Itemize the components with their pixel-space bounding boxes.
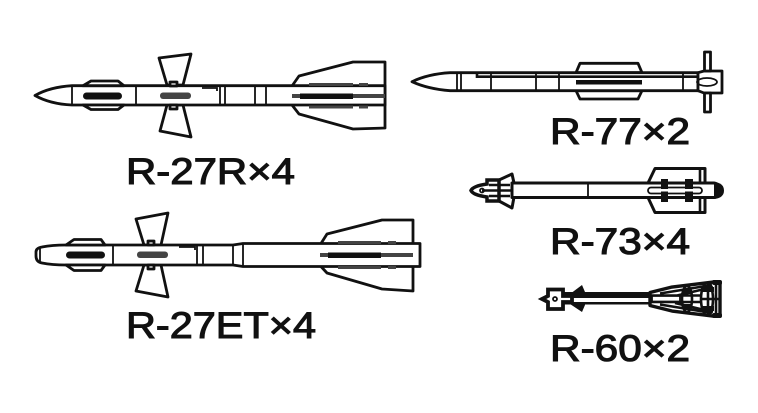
body (36, 244, 420, 266)
missile: R-77 (412, 52, 722, 112)
missile: R-27R (35, 54, 385, 137)
wings (159, 54, 191, 137)
front strakes (66, 240, 105, 270)
nose (471, 180, 499, 201)
strakes (576, 63, 642, 99)
canards (499, 174, 514, 208)
wings (136, 213, 168, 297)
nose (542, 290, 572, 309)
body (512, 183, 720, 198)
label: R-73×4: R-73×4 (550, 221, 690, 262)
canards (570, 285, 585, 312)
label: R-27ET×4: R-27ET×4 (126, 305, 316, 346)
label: R-60×2: R-60×2 (550, 328, 690, 369)
tail end (714, 182, 724, 199)
missile: R-73 (471, 168, 724, 212)
body (412, 73, 698, 91)
missile: R-27ET (36, 213, 420, 297)
tail (698, 71, 722, 93)
tail fins (648, 168, 705, 212)
label: R-27R×4: R-27R×4 (126, 151, 295, 192)
front strakes (83, 81, 124, 110)
tail (650, 282, 720, 316)
tail fins (292, 62, 385, 129)
label: R-77×2: R-77×2 (550, 111, 690, 152)
body (35, 86, 385, 105)
tail fin (704, 52, 710, 112)
body (563, 292, 653, 298)
missile: R-60 (542, 280, 722, 318)
tail fins (321, 220, 413, 291)
